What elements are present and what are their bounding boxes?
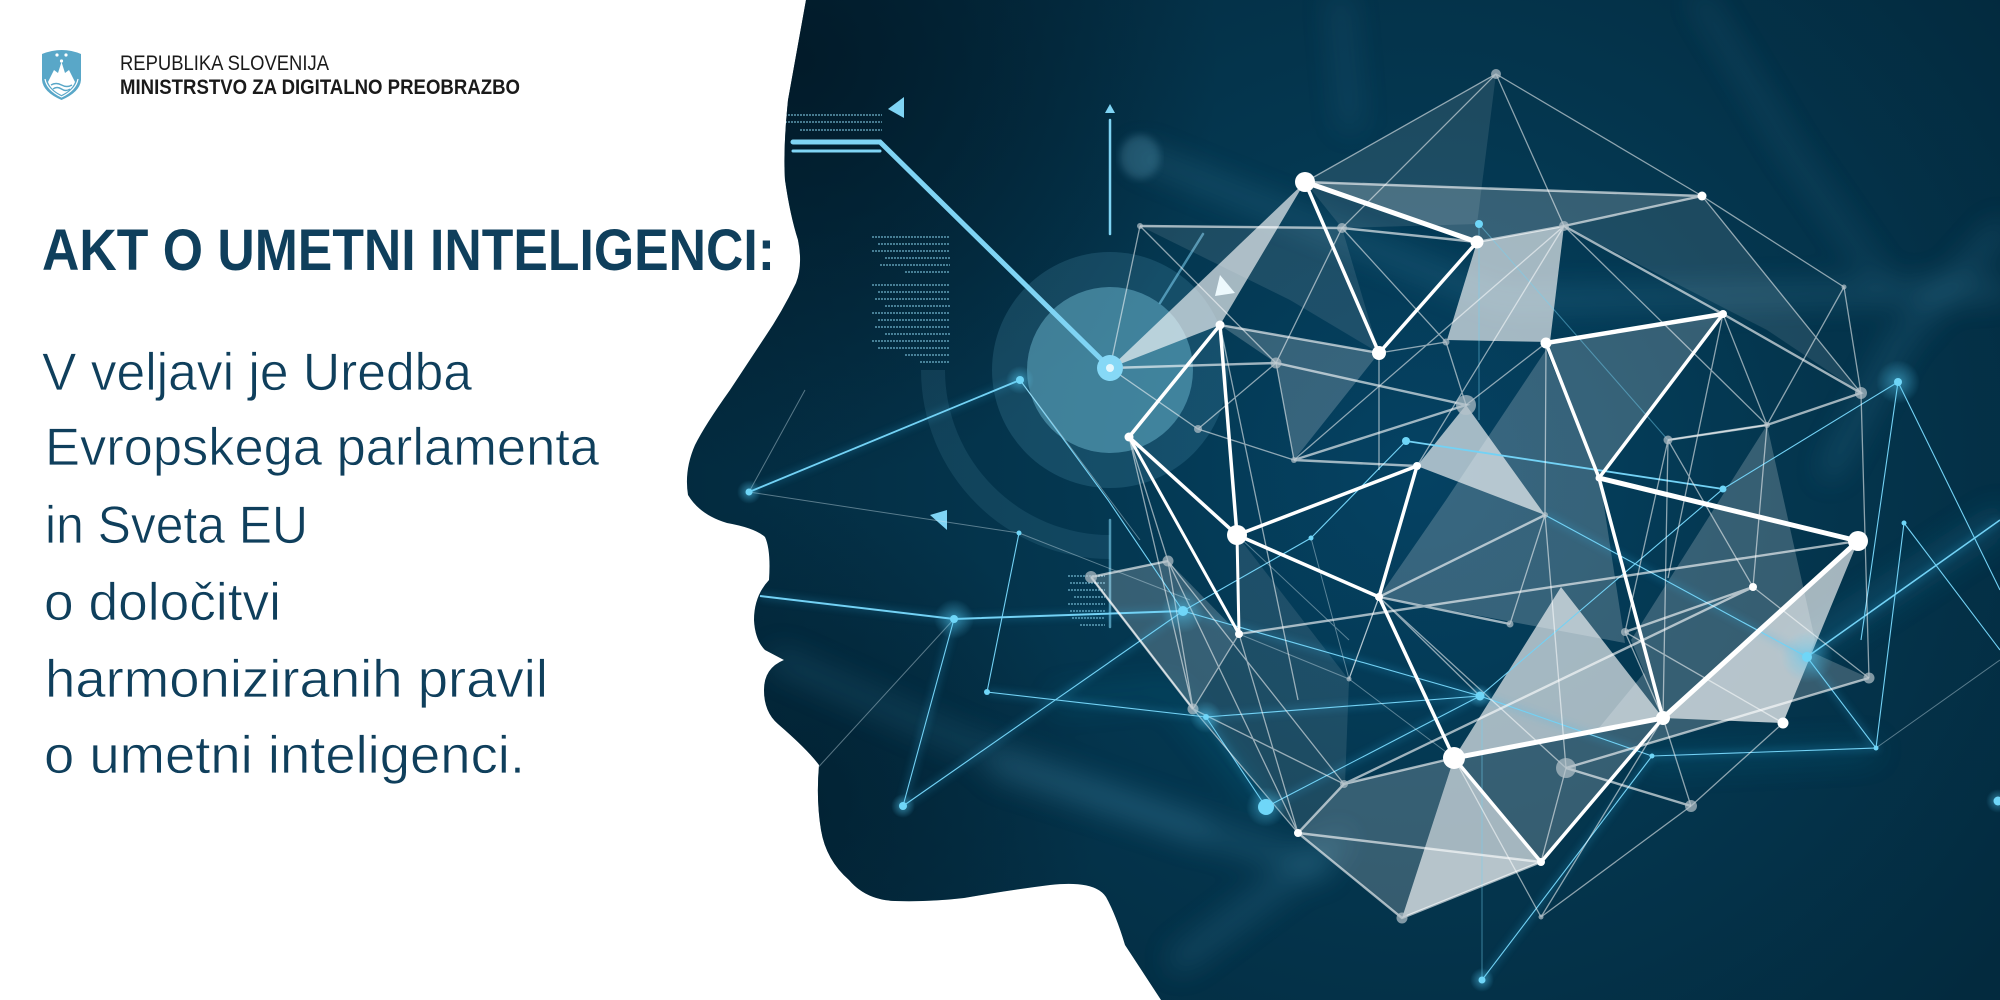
HUD pointer line	[793, 120, 1203, 627]
logo text: REPUBLIKA SLOVENIJA	[120, 52, 329, 75]
gray nodes	[1085, 69, 1874, 924]
logo text: MINISTRSTVO ZA DIGITALNO PREOBRAZBO	[120, 76, 520, 99]
body text	[42, 343, 600, 785]
blue glow halos	[737, 360, 2000, 992]
body text: harmoniziranih pravil	[45, 650, 548, 709]
logo text	[120, 52, 520, 99]
translucent medium polygons	[1091, 182, 1869, 918]
blue nodes	[746, 220, 2000, 984]
HUD small arrow markers	[888, 97, 1235, 530]
gray network lines, thin	[1091, 74, 1869, 917]
white network lines	[1129, 182, 1858, 862]
body text: o umetni inteligenci.	[44, 726, 525, 785]
translucent light polygons	[1110, 182, 1858, 918]
gray network lines, thick	[1091, 182, 1869, 918]
body text: V veljavi je Uredba	[42, 343, 473, 402]
body text: o določitvi	[44, 573, 281, 632]
white nodes	[1124, 172, 1868, 866]
dim network lines	[750, 383, 2000, 767]
body text: in Sveta EU	[45, 496, 308, 555]
logo: coat of arms shield	[42, 50, 81, 100]
hub node	[1097, 355, 1123, 381]
title: AKT O UMETNI INTELIGENCI:	[42, 218, 775, 283]
translucent dim polygons	[1140, 74, 1861, 833]
body text: Evropskega parlamenta	[45, 418, 600, 477]
blue network lines	[749, 224, 2000, 980]
HUD target circles	[921, 252, 1228, 559]
background light streaks	[780, 0, 2000, 960]
HUD micro text blocks	[785, 115, 1105, 625]
silhouette: head profile with network artwork	[680, 0, 2000, 1000]
glow spot	[1120, 135, 1160, 179]
blue network lines, glow	[749, 380, 2000, 980]
